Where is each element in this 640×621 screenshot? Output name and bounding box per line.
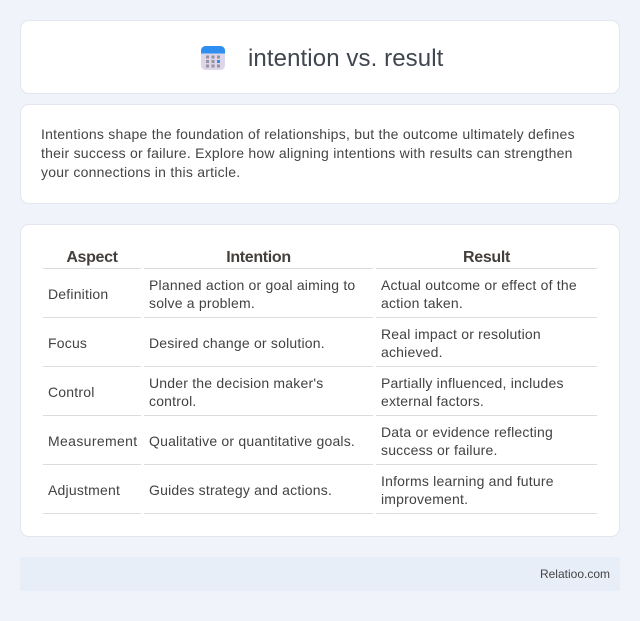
cell: Control result: Partially influenced, includes (381, 375, 564, 391)
cell: Control intention: Under the decision maker's (149, 375, 323, 391)
panel: title card (20, 20, 620, 94)
cell: Adjustment result: improvement. (381, 491, 468, 507)
cell: Definition intention (149, 277, 355, 311)
icon: calendar (201, 46, 225, 70)
header: Aspect: Aspect (66, 249, 118, 266)
intro text: your connections in this article. (41, 164, 240, 180)
cell: Focus result (381, 326, 541, 360)
header: Result: Result (463, 249, 510, 266)
cell: Definition result: action taken. (381, 295, 463, 311)
cell: Adjustment result: Informs learning and future (381, 473, 554, 489)
panel: intro card (20, 104, 620, 204)
cell: Control result (381, 375, 564, 409)
cell: Control intention (149, 375, 323, 409)
panel: comparison table card (20, 224, 620, 537)
cell: Control intention: control. (149, 393, 197, 409)
comparison table (43, 249, 597, 514)
header: Intention: Intention (226, 249, 291, 266)
footer text: Relatioo.com (540, 567, 610, 581)
intro text: Intentions shape the foundation of relationships, but the outcome ultimately defines (41, 126, 575, 142)
cell: Definition result (381, 277, 577, 311)
intro text (41, 126, 575, 180)
cell: Measurement result (381, 424, 553, 458)
title: intention vs. result (248, 45, 443, 72)
cell: Definition intention: Planned action or goal aiming to (149, 277, 355, 293)
cell: Definition intention: solve a problem. (149, 295, 255, 311)
row: Adjustment: Adjustment (48, 482, 120, 498)
cell: Measurement result: Data or evidence reflecting (381, 424, 553, 440)
row: Definition: Definition (48, 286, 108, 302)
cell: Measurement result: success or failure. (381, 442, 498, 458)
cell: Definition result: Actual outcome or effect of the (381, 277, 577, 293)
cell: Measurement intention: Qualitative or quantitative goals. (149, 433, 355, 449)
footer bar (20, 557, 620, 591)
intro text: their success or failure. Explore how aligning intentions with results can strengthen (41, 145, 573, 161)
cell: Control result: external factors. (381, 393, 484, 409)
cell: Adjustment intention: Guides strategy and actions. (149, 482, 332, 498)
cell: Focus result: achieved. (381, 344, 443, 360)
cell: Adjustment result (381, 473, 554, 507)
row: Measurement: Measurement (48, 433, 138, 449)
cell: Focus intention: Desired change or solution. (149, 335, 325, 351)
row: Control: Control (48, 384, 95, 400)
cell: Focus result: Real impact or resolution (381, 326, 541, 342)
row: Focus: Focus (48, 335, 87, 351)
